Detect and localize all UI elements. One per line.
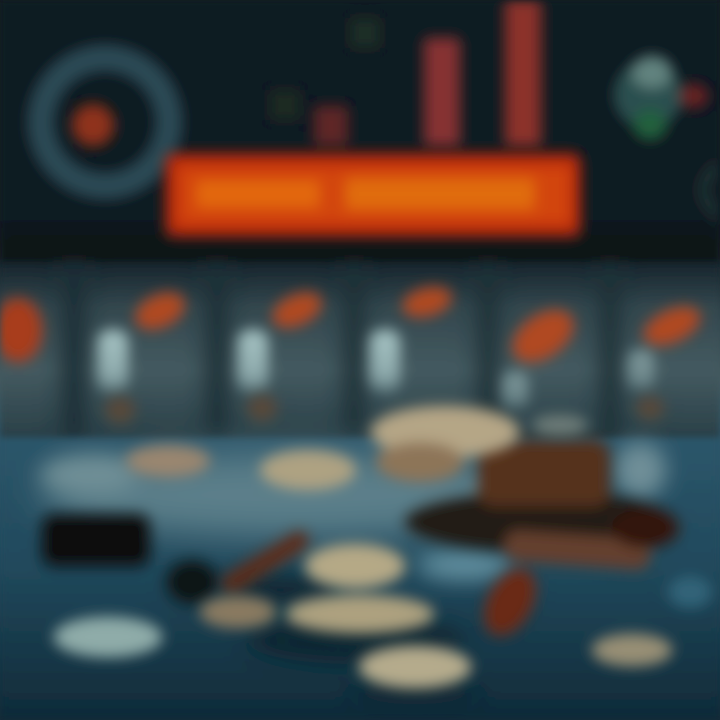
dark object left	[42, 514, 218, 604]
stacked coins pile top right	[371, 406, 588, 482]
white bottles row	[98, 330, 654, 408]
blurred headline word left	[196, 180, 320, 208]
coin shadows	[220, 576, 475, 704]
floor surface	[0, 438, 720, 720]
orange title banner	[166, 154, 580, 236]
flat coins	[54, 445, 672, 666]
middle panel band	[0, 262, 720, 442]
right pie icon	[614, 56, 720, 214]
top dark backdrop	[0, 0, 720, 268]
brown pile shadow and sticks	[217, 440, 679, 644]
ring chart icon	[41, 58, 169, 186]
small brown bases row	[105, 394, 664, 424]
orange arrows row	[0, 282, 706, 373]
bar chart	[270, 0, 541, 146]
blurred headline word right	[345, 178, 535, 210]
central coin stack	[200, 544, 471, 688]
